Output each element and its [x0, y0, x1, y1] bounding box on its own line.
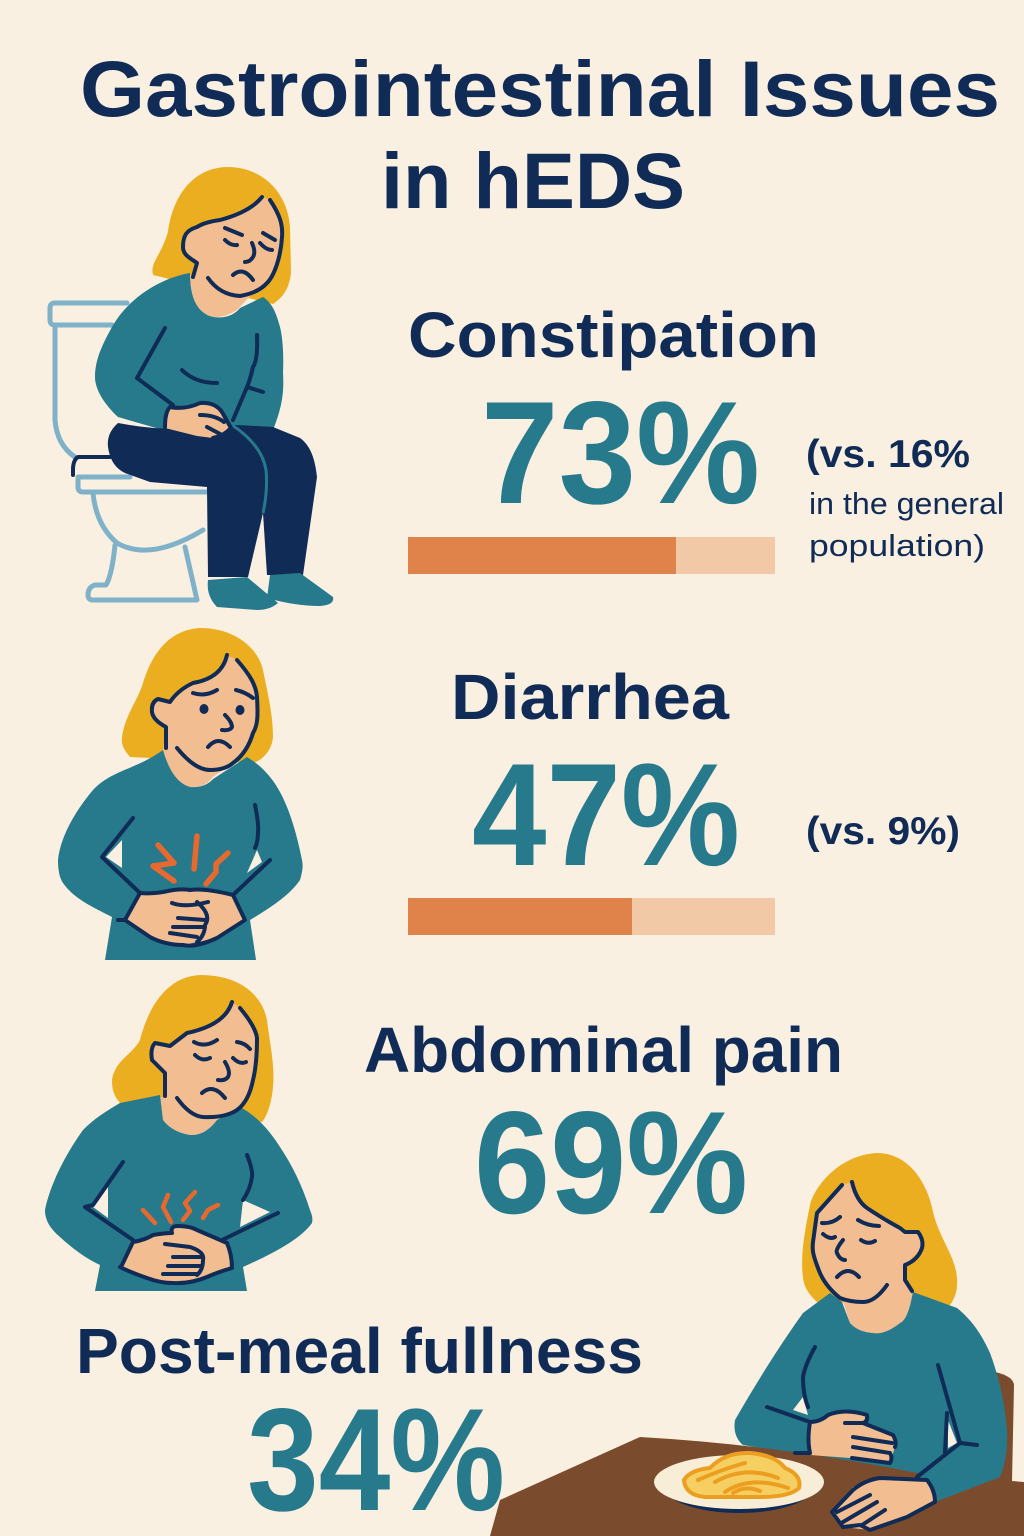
sleeve over table	[917, 1430, 1007, 1502]
heading: constipation: Constipation	[408, 299, 819, 371]
comparison note: constipation	[806, 433, 1004, 563]
heading: post-meal fullness: Post-meal fullness	[76, 1315, 643, 1387]
stat: 69%: 69%	[474, 1081, 748, 1244]
stat: 47%: 47%	[472, 733, 740, 896]
illustration: woman with diarrhea	[58, 628, 303, 960]
title: in hEDS	[381, 136, 685, 225]
table	[490, 1437, 1024, 1536]
plate of pasta	[654, 1453, 824, 1513]
heading: abdominal pain: Abdominal pain	[364, 1014, 843, 1086]
progress bar: 47%	[408, 898, 775, 935]
comparison note: constipation: population)	[809, 528, 985, 563]
title: Gastrointestinal Issues	[80, 44, 1000, 133]
illustration: woman on toilet	[50, 167, 333, 610]
comparison note: constipation: (vs. 16%	[806, 433, 970, 476]
title	[80, 44, 1000, 225]
heading: diarrhea: Diarrhea	[451, 661, 729, 733]
comparison note: constipation: in the general	[809, 486, 1004, 521]
illustration: woman at table with food	[490, 1153, 1024, 1536]
comparison note: diarrhea: (vs. 9%)	[806, 810, 960, 853]
illustration: woman with abdominal pain	[45, 975, 312, 1291]
stat: 73%: 73%	[481, 371, 760, 534]
progress bar: 73%	[408, 537, 775, 574]
